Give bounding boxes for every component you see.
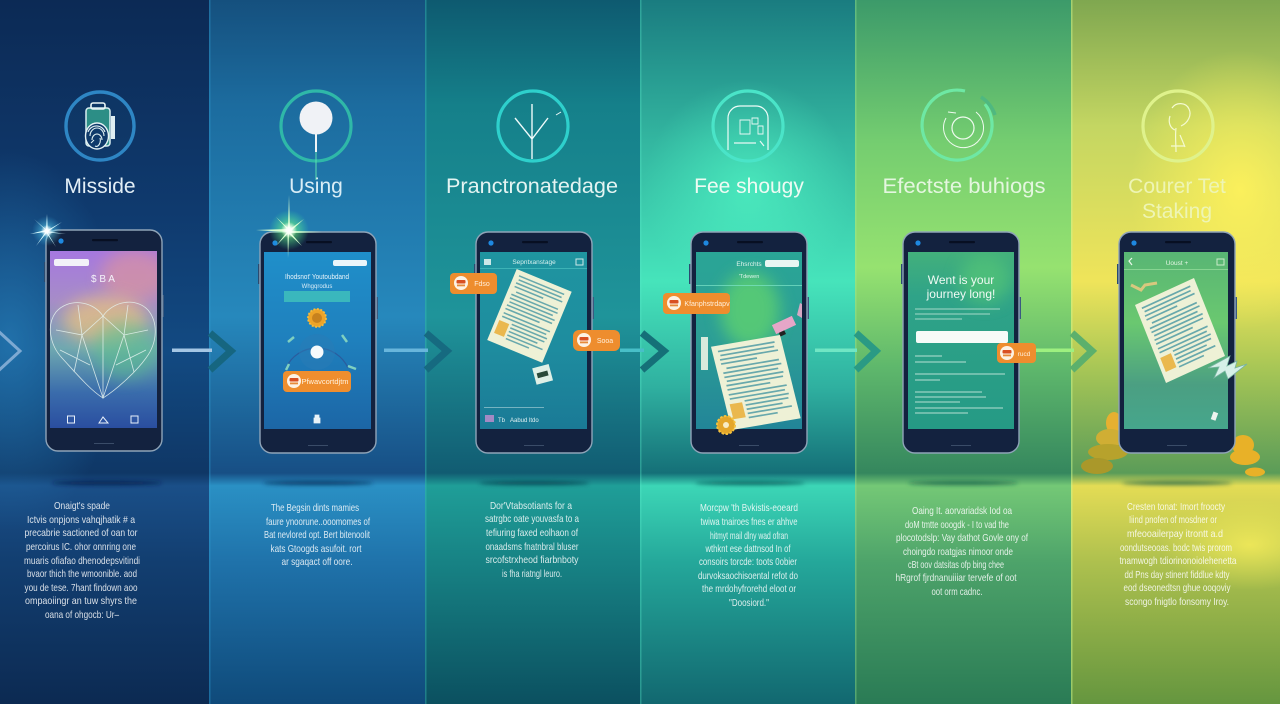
phone screen: gradient — [50, 251, 157, 428]
icon: gold coins right — [1230, 435, 1265, 476]
description 5: plocotodslp: Vay dathot Govle ony of — [896, 533, 1028, 544]
document sheet — [711, 335, 801, 430]
description 6: oondutseooas. bodc twis prorom — [1120, 543, 1232, 554]
description 3: is fha riatngl leuro. — [502, 569, 562, 580]
description 1: Ictvis onpjons vahqjhatik # a — [27, 515, 135, 526]
icon: ring and loop — [922, 90, 995, 160]
document sheet — [1135, 278, 1225, 383]
icon: gold flower badge — [717, 416, 735, 434]
phone mockup: document screen — [1117, 232, 1237, 453]
heading: Misside: Misside — [64, 175, 136, 198]
screen header — [1124, 258, 1228, 270]
phone mockup: dial screen — [258, 232, 378, 453]
heading: Practronatedage: Pranctronatedage — [446, 175, 618, 198]
icon: earbud dot — [281, 91, 351, 180]
pink sticker — [772, 316, 798, 338]
bottom nav icons — [68, 416, 138, 423]
icon: branching line — [498, 91, 568, 161]
screen header: Ehsrchts — [736, 261, 762, 268]
heading: Fee shougy: Fee shougy — [694, 175, 804, 198]
icon: light flare — [30, 214, 66, 247]
description 4: twiwa tnairoes fnes er ahhve — [700, 517, 798, 528]
description 6: Cresten tonat: Imort froocty — [1127, 502, 1226, 513]
description 3 — [485, 501, 579, 580]
callout: orange tag — [663, 293, 730, 314]
input bar — [916, 331, 1008, 343]
shadow under phone 6 — [1122, 481, 1232, 485]
shadow under phone 2 — [263, 481, 373, 485]
screen title: $ B A — [91, 274, 115, 285]
text rows — [915, 356, 1005, 413]
screen header — [696, 260, 802, 286]
callout: orange tag left: Fdso — [474, 281, 490, 288]
panel: step 3 Practronatedage — [425, 0, 640, 704]
heart line art — [50, 302, 155, 398]
arrow: step 1 to 2 — [172, 333, 231, 370]
phone mockup: document screen — [689, 232, 809, 453]
description 6: tnamwogh tdiorinonoiolehenetta — [1120, 556, 1237, 567]
heading: Using: Using — [289, 175, 343, 198]
screen title: Whgqrodus — [302, 284, 332, 290]
phone mockup: form screen — [901, 232, 1021, 453]
screen header: Sepntxanstage — [512, 259, 556, 266]
footer line: Tb Aabud ltdo — [498, 418, 539, 424]
rotated document — [487, 269, 572, 363]
description 4: wthknt ese dattnsod In of — [705, 544, 791, 555]
orange button — [283, 371, 351, 392]
arrow: entry chevron — [0, 329, 20, 373]
callout: orange tag right — [573, 330, 620, 351]
description 6: eod dseonedtsn ghue ooqoviy — [1124, 583, 1231, 594]
screen header: Uoust + — [1166, 260, 1188, 267]
description 3: Dor'Vtabsotiants for a — [490, 501, 572, 512]
screen header — [480, 259, 587, 269]
shadow under phone 5 — [908, 481, 1018, 485]
arrow: step 4 to 5 — [815, 333, 876, 370]
arrow: step 2 to 3 — [384, 333, 447, 370]
description 1: Onaigt's spade — [54, 501, 110, 512]
description 1: oana of ohgocb: Ur– — [45, 610, 119, 621]
description 5: Oaing It. aorvariadsk Iod oa — [912, 506, 1012, 517]
description 4: hitmyt mail dlny wad ofran — [710, 531, 788, 542]
teal banner — [284, 291, 350, 302]
description 1: you de tese. 7hant findown aoo — [24, 583, 138, 594]
callout: orange tag right: Sooa — [597, 338, 613, 345]
screen title: Ihodsnot' Youtoubdand — [285, 274, 349, 281]
callout: orange tag: Kfanphstrdapv — [684, 301, 730, 308]
footer line — [484, 407, 544, 424]
callout: orange tag left — [450, 273, 497, 294]
description 2 — [264, 503, 370, 568]
lock icon — [314, 415, 320, 423]
phone mockup: document screen — [474, 232, 594, 453]
description 1: percoirus IC. ohor onnring one — [26, 542, 136, 553]
heading: Electste bathogs: Efectste buhiogs — [882, 175, 1046, 198]
panel: step 1 Misside — [0, 68, 209, 652]
description 6: Iiind pnofen of mosdner or — [1129, 515, 1217, 526]
heading: Courer Tet Staking: Courer Tet — [1128, 175, 1226, 198]
icon: app sketch — [713, 91, 783, 161]
description 2: ar sgaqact off oore. — [282, 557, 352, 568]
description 6: scongo fnigtlo fonsomy Iroy. — [1125, 597, 1229, 608]
heading: Courer Tet Staking — [1128, 175, 1226, 223]
description 4: Morcpw 'th Bvkistis-eoeard — [700, 503, 798, 514]
description 5: hRgrof fjrdnanuiiiar tervefe of oot — [896, 573, 1017, 584]
description 6: dd Pns day stinent fiddlue kdty — [1124, 570, 1230, 581]
screen title — [285, 274, 349, 290]
small note card — [532, 364, 553, 385]
description 3: satrgbc oate youvasfa to a — [485, 514, 579, 525]
gear icon — [308, 309, 326, 327]
small pen doodle — [1131, 283, 1157, 290]
description 3: srcofstrxheod fiarbnboty — [486, 555, 579, 566]
description 3: tefiuring faxed eolhaon of — [486, 528, 578, 539]
description 2: Bat nevlored opt. Bert bitenoolit — [264, 530, 370, 541]
phone mockup: heart screen — [44, 230, 169, 451]
arrow: step 5 to 6 — [1036, 333, 1092, 370]
description 4: durvoksaochisoental refot do — [698, 571, 798, 582]
description 5: choingdo roatgjas nimoor onde — [903, 547, 1013, 558]
description 5: doM tmtte ooogdk - I to vad the — [905, 520, 1009, 531]
description 5 — [896, 506, 1028, 598]
description 2: The Begsin dints mamies — [271, 503, 359, 514]
description 4 — [698, 503, 798, 609]
description 5: cBt oov datsitas ofp bing chee — [908, 560, 1004, 571]
small figure — [1211, 412, 1218, 421]
description 6 — [1120, 502, 1237, 608]
screen header pill — [54, 259, 89, 266]
callout: orange tag — [997, 343, 1036, 363]
description 1: ompaoiingr an tuw shyrs the — [25, 596, 137, 607]
icon: fingerprint badge — [66, 92, 134, 160]
description 2: faure ynoorune..ooomomes of — [266, 517, 370, 528]
description 5: oot orm cadnc. — [932, 587, 982, 598]
panel: step 6 Courer Tet Staking — [1071, 0, 1280, 704]
description 6: mfeooailerpay itrontt a.d — [1127, 529, 1223, 540]
screen heading — [926, 273, 995, 301]
icon: sketch figure — [1143, 91, 1213, 161]
arrow: step 3 to 4 — [620, 333, 664, 370]
panel: step 2 Using — [209, 0, 425, 704]
paragraph lines — [915, 309, 1000, 319]
screen heading: journey long! — [926, 287, 995, 301]
description 1: precabrie sactioned of oan tor — [24, 528, 138, 539]
heading: Courer Tet Staking: Staking — [1142, 200, 1212, 223]
description 1 — [24, 501, 140, 621]
sidebar strip — [701, 337, 708, 370]
description 1: muaris ofiafao dhenodepsvitindi — [24, 556, 140, 567]
panel: step 5 Electste bathogs — [855, 0, 1071, 704]
description 3: onaadsms fnatnbral bluser — [486, 542, 579, 553]
description 4: the mrdohyfrorehd eloot or — [702, 584, 796, 595]
icon: green light flare — [256, 195, 322, 258]
shadow under phone 3 — [479, 481, 589, 485]
description 2: kats Gtoogds asufoit. rort — [270, 544, 362, 555]
screen header pill — [333, 260, 367, 266]
orbit dial — [286, 334, 356, 370]
panel: step 4 Fee shougy — [640, 0, 855, 704]
icon: lightning ribbon — [1208, 356, 1247, 379]
screen header: 'Tdewen — [739, 274, 759, 280]
shadow under phone 4 — [695, 481, 805, 485]
icon: gold coins left — [1081, 412, 1128, 474]
callout: orange tag: rucd — [1018, 351, 1031, 358]
description 1: bvaor thich the wmoonible. aod — [27, 569, 137, 580]
description 4: "Doosiord." — [729, 598, 769, 609]
description 4: consoirs torcde: toots 0obier — [699, 557, 797, 568]
orange button: Pfwavcortdjtm — [301, 377, 349, 386]
screen heading: Went is your — [928, 273, 994, 287]
shadow under phone 1 — [52, 481, 162, 485]
